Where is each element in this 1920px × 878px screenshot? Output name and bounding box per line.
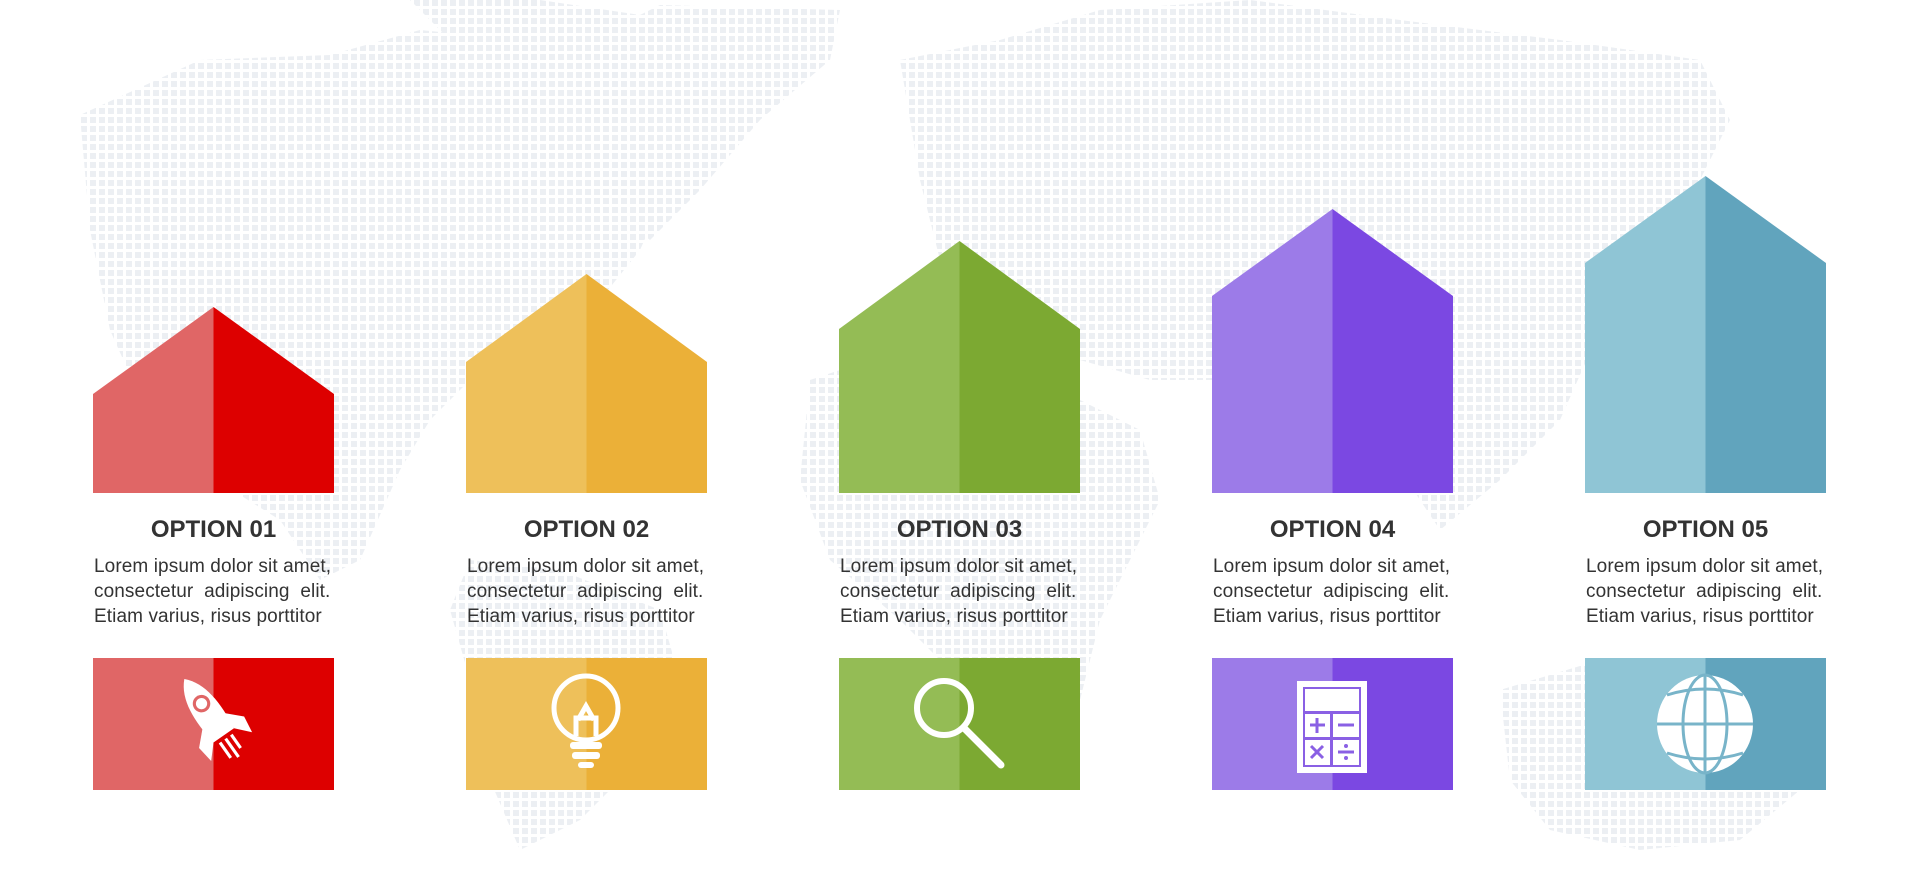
heading: OPTION 04 — [1270, 516, 1395, 543]
panel: option 02 — [466, 274, 707, 790]
icon: magnifier — [839, 658, 1080, 790]
shape: red pentagon — [93, 307, 334, 493]
icon: light bulb — [466, 658, 707, 790]
panel: option 05 — [1585, 176, 1826, 790]
text block — [1213, 556, 1450, 627]
icon: rocket — [93, 658, 334, 790]
panel: option 03 — [839, 241, 1080, 790]
icon: calculator — [1212, 658, 1453, 790]
text block: Lorem ipsum dolor sit amet, — [1213, 556, 1450, 577]
text block: Etiam varius, risus porttitor — [840, 606, 1068, 627]
heading: OPTION 03 — [897, 516, 1022, 543]
heading: OPTION 02 — [524, 516, 649, 543]
panel: option 01 — [93, 307, 334, 790]
text block: Etiam varius, risus porttitor — [467, 606, 695, 627]
text block: Lorem ipsum dolor sit amet, — [840, 556, 1077, 577]
heading: OPTION 05 — [1643, 516, 1768, 543]
text block: Etiam varius, risus porttitor — [1586, 606, 1814, 627]
text block: Lorem ipsum dolor sit amet, — [94, 556, 331, 577]
text block: Lorem ipsum dolor sit amet, — [467, 556, 704, 577]
panel: option 04 — [1212, 209, 1453, 790]
text block — [94, 556, 331, 627]
text block — [840, 556, 1077, 627]
text block: Etiam varius, risus porttitor — [1213, 606, 1441, 627]
shape: green pentagon — [839, 241, 1080, 493]
text block: Lorem ipsum dolor sit amet, — [1586, 556, 1823, 577]
text block: Etiam varius, risus porttitor — [94, 606, 322, 627]
text block: consectetur adipiscing elit. — [1586, 581, 1822, 602]
shape: blue pentagon — [1585, 176, 1826, 493]
text block: consectetur adipiscing elit. — [467, 581, 703, 602]
icon: globe — [1585, 658, 1826, 790]
text block: consectetur adipiscing elit. — [1213, 581, 1449, 602]
text block: consectetur adipiscing elit. — [840, 581, 1076, 602]
text block — [1586, 556, 1823, 627]
shape: purple pentagon — [1212, 209, 1453, 493]
text block: consectetur adipiscing elit. — [94, 581, 330, 602]
heading: OPTION 01 — [151, 516, 276, 543]
shape: yellow pentagon — [466, 274, 707, 493]
text block — [467, 556, 704, 627]
